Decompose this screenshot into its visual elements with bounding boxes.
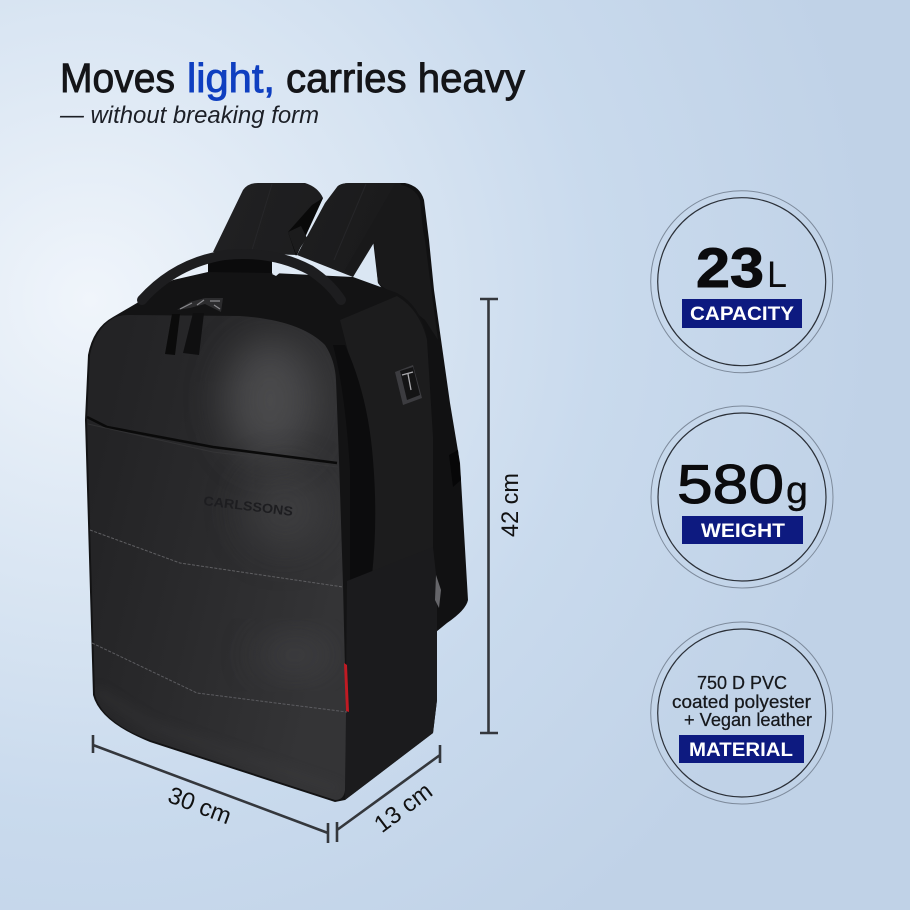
title: Moves: [60, 55, 175, 101]
badge: material: + Vegan leather: [684, 710, 812, 730]
leather highlights: [215, 334, 322, 538]
depth dimension: 13 cm: [337, 745, 440, 842]
badge: capacity: [651, 191, 833, 373]
body shell: [85, 272, 437, 802]
stitched seams: [90, 530, 343, 587]
badge: material: [651, 622, 833, 804]
pocket zipper: [87, 417, 337, 463]
backpack illustration: [85, 183, 468, 802]
left shoulder strap: [213, 183, 323, 255]
back strap: [337, 183, 468, 632]
side logo tag: [395, 365, 422, 405]
badge: capacity: 23: [696, 236, 764, 299]
depth dimension: 13 cm: 13 cm: [369, 778, 438, 838]
handle gap highlight: [272, 265, 282, 276]
badge: weight: WEIGHT: [701, 521, 785, 542]
height dimension: 42 cm: 42 cm: [497, 473, 524, 537]
red tag: [344, 663, 349, 712]
badge: weight: 580: [677, 453, 784, 515]
badge: material: coated polyester: [672, 692, 811, 712]
front leather panel: [87, 315, 346, 800]
strap buckle: [449, 450, 461, 487]
title: light,: [187, 55, 275, 101]
badge: material: MATERIAL: [689, 740, 793, 761]
badge: weight: [651, 406, 833, 588]
width dimension: 30 cm: 30 cm: [164, 782, 235, 830]
subtitle: — without breaking form: [59, 102, 319, 129]
side upper panel: [340, 296, 433, 575]
badge: material: 750 D PVC: [697, 673, 787, 693]
badge: capacity: CAPACITY: [690, 304, 794, 325]
title: carries heavy: [286, 55, 525, 101]
title: [60, 55, 525, 101]
badge: weight: g: [786, 470, 808, 512]
side zipper: [435, 575, 441, 608]
filler behind handle: [208, 256, 272, 275]
badge: capacity: L: [767, 254, 787, 295]
top handle: [142, 254, 341, 300]
side lower panel: [345, 547, 437, 800]
right shoulder strap: [297, 183, 402, 277]
brand emboss: CARLSSONS: [203, 493, 294, 519]
height dimension: 42 cm: [480, 299, 524, 733]
side mesh panel: [333, 345, 375, 582]
width dimension: 30 cm: [93, 735, 328, 843]
zipper pulls: [165, 298, 223, 355]
